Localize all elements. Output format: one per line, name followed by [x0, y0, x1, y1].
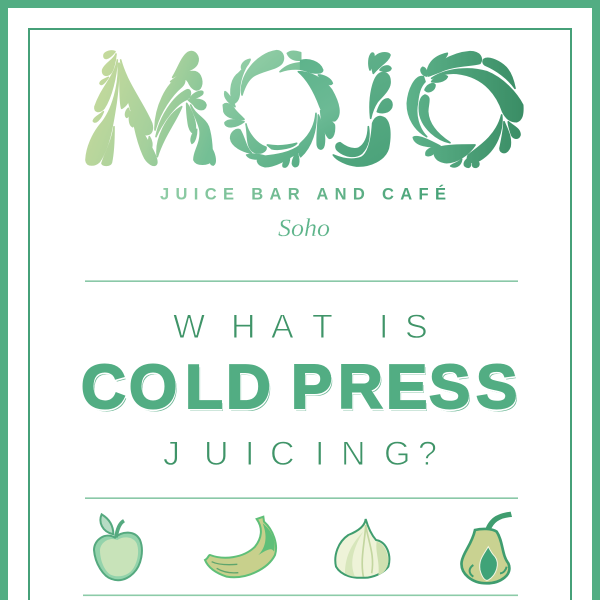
- divider: [83, 594, 518, 596]
- cold press offset outline: COLD PRESS: [82, 356, 519, 424]
- logo letter O: [223, 51, 339, 167]
- divider: [85, 498, 518, 499]
- logo: MOJO: [86, 51, 523, 167]
- subtitle: juice bar and cafe: JUICE BAR AND CAFÉ: [160, 184, 446, 204]
- logo letter O (second): [407, 52, 523, 167]
- logo letter M: [86, 51, 215, 165]
- icon: banana: [205, 517, 276, 577]
- heading: juicing: JUICING?: [163, 435, 437, 473]
- divider: [85, 280, 518, 282]
- icon: garlic: [335, 519, 389, 578]
- location: Soho: Soho: [278, 215, 330, 242]
- logo letter J: [333, 53, 392, 166]
- icon: pear: [462, 512, 512, 583]
- heading: cold press: [81, 353, 519, 424]
- heading: what is: WHAT IS: [173, 308, 428, 346]
- cold press white gap: COLD PRESS: [81, 354, 517, 423]
- cold press face: COLD PRESS: [81, 353, 517, 422]
- icon: apple: [94, 514, 142, 580]
